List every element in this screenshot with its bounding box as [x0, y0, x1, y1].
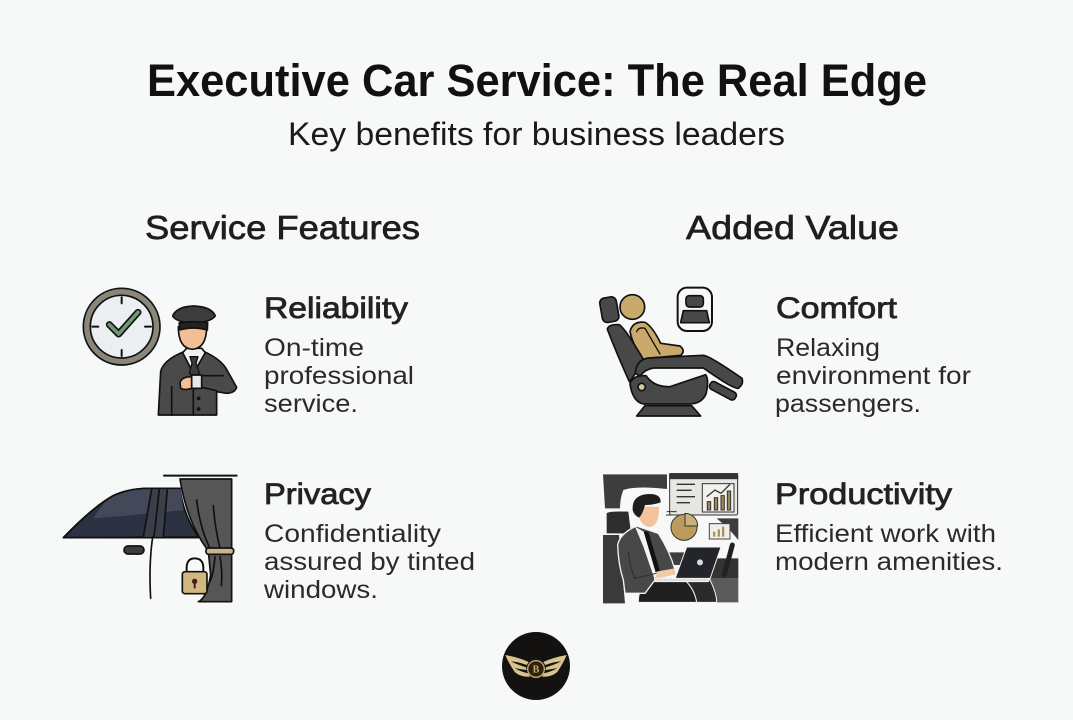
right wing	[542, 655, 567, 677]
armrest and leg rest	[635, 355, 743, 388]
text block: comfort	[775, 292, 971, 418]
businessman figure	[618, 494, 717, 602]
centre coin	[528, 661, 544, 677]
door handle and seam	[124, 537, 153, 598]
pedestal	[637, 406, 701, 416]
icon: executive working in car	[603, 474, 738, 603]
pie chart	[666, 512, 698, 540]
clock face with check mark	[83, 288, 160, 365]
text block: productivity: Efficient work with	[775, 520, 996, 548]
seat badge	[678, 288, 712, 331]
text block: reliability: On-time	[264, 334, 364, 362]
text block: productivity: Productivity	[775, 478, 952, 511]
subtitle: Key benefits for business leaders	[288, 116, 785, 152]
icon: clock and chauffeur	[83, 288, 237, 415]
text block: reliability: service.	[264, 390, 358, 418]
text block: privacy: assured by tinted	[264, 548, 475, 576]
passenger head	[620, 295, 645, 319]
seat back	[607, 325, 643, 382]
seat base	[630, 375, 708, 404]
car interior background	[603, 474, 738, 603]
text block: comfort: environment for	[776, 362, 971, 390]
text block: privacy: Privacy	[264, 478, 371, 511]
text block: privacy: Confidentiality	[264, 520, 442, 548]
text block: reliability: professional	[264, 362, 414, 390]
foot rest	[708, 380, 738, 401]
heading: service features: Service Features	[145, 209, 420, 246]
coin letter: B	[533, 665, 540, 676]
laptop	[654, 547, 721, 582]
icon: car window, curtain and padlock	[63, 476, 237, 602]
passenger body	[630, 322, 683, 359]
text block: reliability	[264, 292, 414, 418]
text block: productivity: modern amenities.	[775, 548, 1003, 576]
text block: comfort: passengers.	[775, 390, 921, 418]
title: Executive Car Service: The Real Edge	[147, 55, 927, 106]
curtain	[164, 476, 237, 602]
tinted car window	[63, 488, 198, 538]
text block: privacy	[263, 478, 475, 604]
pivot	[638, 383, 645, 391]
logo: winged badge	[502, 632, 570, 700]
text block: productivity	[775, 478, 1003, 576]
text block: reliability: Reliability	[264, 292, 408, 325]
text block: privacy: windows.	[263, 576, 378, 604]
heading: added value: Added Value	[686, 209, 899, 246]
presentation screen with bar chart	[670, 474, 738, 515]
text block: comfort: Comfort	[776, 292, 898, 325]
small bar chart card	[709, 524, 730, 539]
chauffeur figure	[158, 306, 237, 415]
padlock	[182, 558, 207, 594]
headrest	[599, 296, 620, 323]
left wing	[505, 655, 530, 677]
text block: comfort: Relaxing	[776, 334, 880, 362]
icon: reclining seat	[599, 288, 743, 416]
